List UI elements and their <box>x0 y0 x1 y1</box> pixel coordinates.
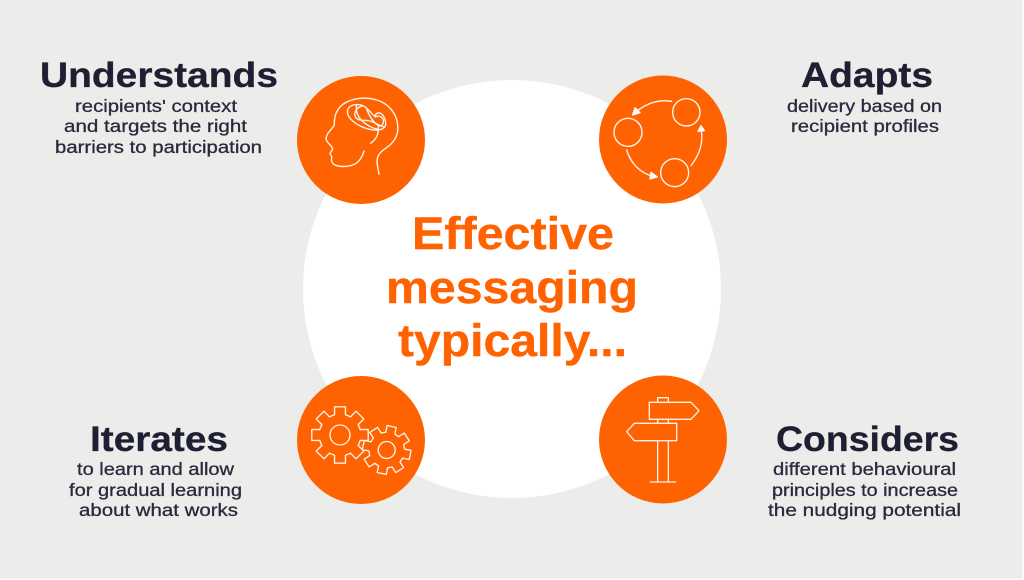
title: Effective <box>412 208 614 259</box>
text block: Understands: barriers to participation <box>55 137 262 157</box>
icon: head with tangled brain <box>297 76 425 204</box>
title <box>386 208 638 366</box>
text block: Adapts: delivery based on <box>787 96 942 116</box>
text block: Understands: and targets the right <box>64 116 247 136</box>
text block: Understands: recipients' context <box>75 96 237 116</box>
text block: Considers: different behavioural <box>773 459 956 479</box>
text block: Adapts <box>787 56 942 136</box>
title: messaging <box>386 262 638 313</box>
central white circle <box>303 80 721 498</box>
text block: Iterates <box>69 420 242 520</box>
text block: Considers: Considers <box>776 420 959 459</box>
text block: Iterates: about what works <box>79 500 238 520</box>
text block: Adapts: Adapts <box>801 56 933 95</box>
text block: Considers: the nudging potential <box>768 500 961 520</box>
text block: Considers: principles to increase <box>772 480 958 500</box>
text block: Iterates: to learn and allow <box>77 459 234 479</box>
title: typically... <box>398 315 627 366</box>
icon: cycle of three circles <box>599 76 727 204</box>
text block: Iterates: Iterates <box>90 420 228 459</box>
text block: Understands <box>40 56 278 157</box>
text block: Understands: Understands <box>40 56 278 95</box>
text block: Considers <box>768 420 961 520</box>
text block: Iterates: for gradual learning <box>69 480 242 500</box>
text block: Adapts: recipient profiles <box>791 116 939 136</box>
icon: signpost <box>599 376 727 504</box>
icon: two interlocking gears <box>297 376 425 504</box>
